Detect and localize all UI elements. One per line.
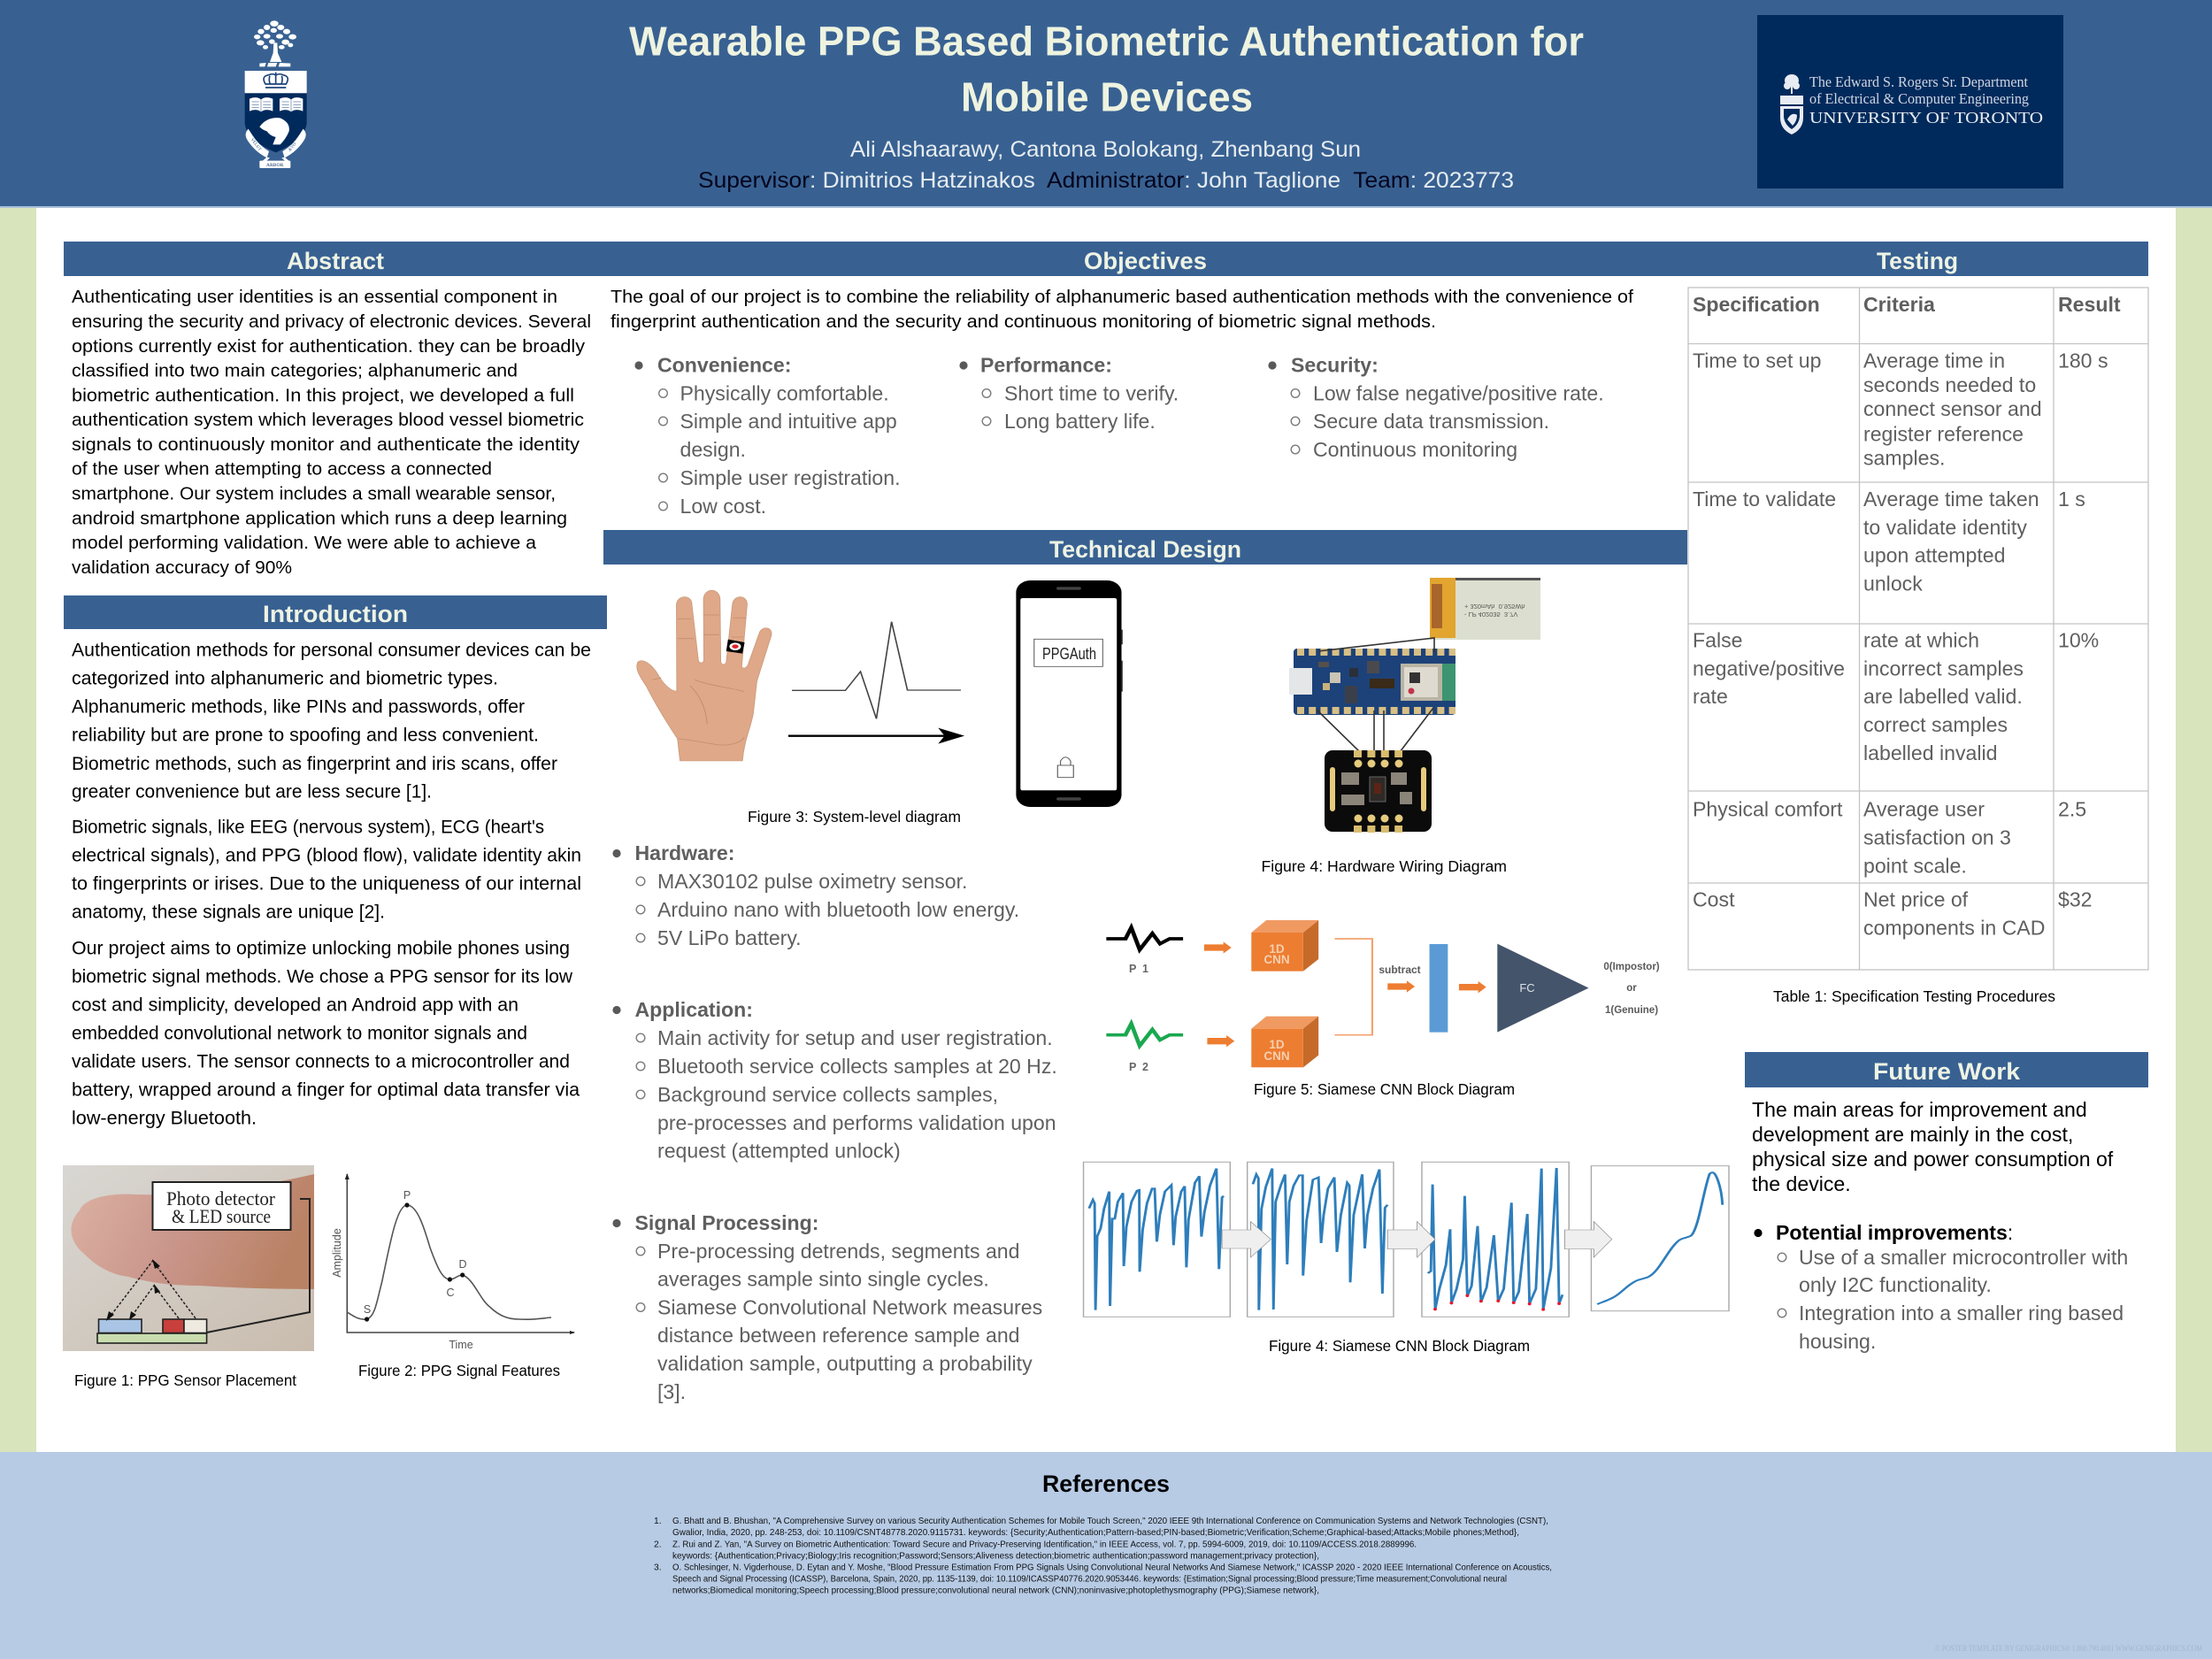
row: cost: components in CAD — [1863, 917, 2045, 940]
row: physical comfort — [1693, 798, 2086, 878]
reference list: 2. — [654, 1540, 662, 1550]
figure 2: PPG signal features: C — [446, 1286, 455, 1299]
future work text — [1752, 1098, 2114, 1195]
technical design: application list: Bluetooth service collects samples at 20 Hz. — [657, 1055, 1057, 1078]
introduction text: anatomy, these signals are unique [2]. — [72, 901, 385, 922]
technical design: signal processing list: Siamese Convolutional Network measures — [657, 1295, 1042, 1318]
fully connected block — [1497, 944, 1589, 1033]
future work text: the device. — [1752, 1172, 1851, 1195]
figure 5: siamese CNN block diagram: 1D — [1269, 942, 1285, 956]
objectives: performance list: Short time to verify. — [1004, 381, 1179, 404]
connecting wires — [1317, 638, 1434, 752]
figure 5: siamese CNN block diagram: CNN — [1263, 953, 1290, 966]
row: false rate: negative/positive — [1693, 657, 1845, 680]
orange arrows — [1204, 941, 1486, 1047]
university crest logo: VELUT — [250, 138, 262, 152]
row: time to validate: Average time taken — [1863, 488, 2039, 511]
introduction text: battery, wrapped around a finger for optimal data transfer via — [72, 1079, 580, 1101]
figure 1: PPG sensor placement: & LED source — [172, 1205, 271, 1227]
abstract text: android smartphone application which runs a deep learning — [72, 508, 567, 528]
left side strip — [0, 207, 36, 1453]
abstract text: options currently exist for authentication. they can be broadly — [72, 336, 586, 357]
figure 5: siamese CNN block diagram: or — [1626, 983, 1637, 994]
heading: objectives: Objectives — [1084, 248, 1207, 274]
abstract text: biometric authentication. In this project, we developed a full — [72, 385, 574, 405]
row: time to validate: to validate identity — [1863, 516, 2027, 539]
figure: signal processing stages — [1084, 1162, 1729, 1317]
figure 5: siamese CNN block diagram: FC — [1519, 981, 1535, 995]
row: physical comfort: point scale. — [1863, 855, 1967, 878]
icon: hand with ring sensor — [637, 590, 772, 761]
top section bar — [64, 242, 2148, 276]
stage 4 single cycle — [1591, 1166, 1729, 1311]
row: false rate — [1693, 628, 2099, 764]
objectives: security list: Continuous monitoring — [1313, 438, 1517, 461]
title: Wearable PPG Based Biometric Authentication for — [629, 18, 1584, 64]
MAX30102 sensor board — [1325, 750, 1432, 832]
future work: potential improvements list — [1754, 1221, 2128, 1353]
heading: testing: Testing — [1877, 248, 1958, 274]
future work text: physical size and power consumption of — [1752, 1148, 2114, 1171]
technical design: signal processing list: averages sample sinto single cycles. — [657, 1268, 989, 1291]
technical design: hardware list — [612, 841, 1019, 949]
technical design: application list: request (attempted unlock) — [657, 1140, 901, 1163]
introduction text: low-energy Bluetooth. — [72, 1108, 257, 1129]
battery: + 320mAh 0.925Wh — [1464, 603, 1525, 611]
row: physical comfort: 2.5 — [2058, 798, 2086, 821]
objectives: convenience list: Low cost. — [680, 495, 766, 518]
row: physical comfort: Average user — [1863, 798, 1985, 821]
future work: potential improvements list: only I2C functionality. — [1799, 1273, 1992, 1296]
objectives text: fingerprint authentication and the security and continuous monitoring of biometric signal methods. — [611, 311, 1436, 332]
header banner — [0, 0, 2212, 208]
caption: figure 3: Figure 3: System-level diagram — [748, 808, 961, 826]
figure 1: PPG sensor placement: Photo detector — [166, 1187, 276, 1210]
caption: figure 2: Figure 2: PPG Signal Features — [358, 1362, 560, 1379]
introduction text: validate users. The sensor connects to a microcontroller and — [72, 1051, 570, 1072]
caption: figure 4 hardware: Figure 4: Hardware Wiring Diagram — [1262, 857, 1507, 875]
abstract text: authentication system which leverages blood vessel biometric — [72, 410, 584, 430]
row: time to set up: Average time in — [1863, 349, 2005, 373]
introduction text: Our project aims to optimize unlocking mobile phones using — [72, 938, 570, 959]
reference list: O. Schlesinger, N. Vigderhouse, D. Eytan and Y. Moshe, "Blood Pressure Estimation From PPG Signals Using Convolutional Neural Networks And Siamese Network," ICASSP 2020 - 2020 IEEE International Conference on Acoustics, — [672, 1563, 1552, 1573]
introduction text: reliability but are prone to spoofing and less convenient. — [72, 724, 539, 745]
stage 3 segmented signal — [1422, 1162, 1569, 1317]
abstract text: smartphone. Our system includes a small wearable sensor, — [72, 483, 556, 504]
figure 2: PPG signal features: S — [364, 1303, 371, 1316]
row: physical comfort: Physical comfort — [1693, 798, 1843, 821]
authors: Ali Alshaarawy, Cantona Bolokang, Zhenbang Sun — [850, 137, 1361, 162]
row: false rate: incorrect samples — [1863, 657, 2024, 680]
merge bracket — [1334, 939, 1372, 1035]
references panel — [0, 1452, 2212, 1659]
department logo: UNIVERSITY OF TORONTO — [1809, 109, 2043, 127]
figure 1: PPG sensor placement — [63, 1165, 314, 1351]
figure 5: siamese CNN block diagram: 1D — [1269, 1038, 1285, 1051]
objectives text — [611, 287, 1633, 332]
stage 2 detrended signal — [1248, 1162, 1394, 1317]
introduction text — [72, 639, 591, 1129]
figure 5: siamese CNN block diagram — [1106, 920, 1660, 1073]
caption: figure 4 siamese: Figure 4: Siamese CNN Block Diagram — [1269, 1337, 1530, 1355]
row: physical comfort: satisfaction on 3 — [1863, 826, 2011, 849]
input signal P2 — [1106, 1024, 1183, 1046]
arrow: wireless transfer — [788, 728, 964, 744]
figure 2: PPG signal features: D — [458, 1258, 467, 1271]
row: time to validate: unlock — [1863, 572, 1923, 595]
objectives: security list: Secure data transmission. — [1313, 410, 1549, 433]
input signal P1 — [1106, 927, 1183, 949]
row: time to set up — [1693, 349, 2108, 470]
abstract text: signals to continuously monitor and authenticate the identity — [72, 434, 580, 455]
introduction text: greater convenience but are less secure [1]. — [72, 780, 432, 802]
block arrows — [1222, 1222, 1612, 1257]
future work text: The main areas for improvement and — [1752, 1098, 2087, 1121]
university crest logo: ARBOR — [266, 163, 284, 168]
CNN cube bottom — [1251, 1017, 1318, 1067]
reference list: Z. Rui and Z. Yan, "A Survey on Biometric Authentication: Toward Secure and Privacy-Preserving Identification," in IEEE Access, vol. 7, pp. 5994-6009, 2019, doi: 10.1109/ACCESS.2018.2889996. — [672, 1540, 1417, 1550]
objectives: security list: Security: — [1291, 354, 1379, 377]
references heading: References — [1042, 1471, 1170, 1497]
abstract text: classified into two main categories; alphanumeric and — [72, 361, 518, 380]
introduction text: categorized into alphanumeric and biometric types. — [72, 667, 498, 688]
caption: figure 5: Figure 5: Siamese CNN Block Diagram — [1254, 1080, 1515, 1098]
introduction text: cost and simplicity, developed an Android app with an — [72, 995, 518, 1016]
introduction text: embedded convolutional network to monitor signals and — [72, 1023, 527, 1044]
technical design: signal processing list: distance between reference sample and — [657, 1324, 1020, 1347]
department logo: of Electrical & Computer Engineering — [1809, 90, 2029, 107]
row: false rate: False — [1693, 628, 1742, 651]
abstract text — [72, 287, 591, 578]
abstract text: of the user when attempting to access a connected — [72, 459, 492, 480]
figure 2: PPG signal features: Amplitude — [331, 1228, 343, 1278]
row: time to validate — [1693, 488, 2085, 595]
introduction text: biometric signal methods. We chose a PPG sensor for its low — [72, 966, 572, 987]
objectives: convenience list: design. — [680, 438, 746, 461]
figure 2: PPG signal features: P — [403, 1189, 411, 1202]
objectives: performance list: Long battery life. — [1004, 410, 1156, 433]
stage 1 raw signal — [1084, 1162, 1230, 1317]
caption: table 1: Table 1: Specification Testing Procedures — [1773, 987, 2055, 1005]
row: false rate: correct samples — [1863, 713, 2008, 736]
table header row: Result — [2058, 293, 2121, 316]
department logo: The Edward S. Rogers Sr. Department — [1809, 73, 2028, 90]
figure 2: PPG signal features: Time — [449, 1339, 473, 1351]
technical design: signal processing list: Signal Processing: — [635, 1211, 818, 1234]
technical design: signal processing list: validation sample, outputting a probability — [657, 1352, 1033, 1375]
university crest logo — [245, 20, 307, 168]
abstract text: Authenticating user identities is an essential component in — [72, 287, 557, 307]
reference list: 1. — [654, 1517, 662, 1526]
objectives text: The goal of our project is to combine the reliability of alphanumeric based authentication methods with the convenience of — [611, 287, 1633, 307]
caption: figure 1: Figure 1: PPG Sensor Placement — [74, 1371, 296, 1389]
objectives: convenience list: Simple and intuitive app — [680, 410, 897, 433]
reference list: keywords: {Authentication;Privacy;Biology;Iris recognition;Password;Sensors;Aliveness detection;biometric authentication;password management;privacy protection}, — [672, 1552, 1319, 1561]
table header row — [1693, 293, 2121, 316]
title: Mobile Devices — [961, 74, 1253, 120]
row: false rate: rate — [1693, 685, 1728, 708]
row: false rate: 10% — [2058, 628, 2099, 651]
figure 5: siamese CNN block diagram: subtract — [1379, 964, 1421, 976]
technical design: hardware list: Hardware: — [635, 841, 734, 864]
objectives: convenience list: Physically comfortable. — [680, 381, 889, 404]
reference list: Speech and Signal Processing (ICASSP), Barcelona, Spain, 2020, pp. 1135-1139, doi: 10.1109/ICASSP40776.2020.9053446. keywords: {Estimation;Signal processing;Blood pressure;Time measurement;Convolutional neural — [672, 1575, 1507, 1584]
row: time to set up: samples. — [1863, 447, 1945, 470]
figure 5: siamese CNN block diagram: CNN — [1263, 1049, 1290, 1063]
figure 5: siamese CNN block diagram: 0(Impostor) — [1603, 962, 1660, 972]
heading: abstract: Abstract — [287, 248, 384, 274]
row: time to validate: upon attempted — [1863, 544, 2005, 567]
row: cost — [1693, 888, 2093, 940]
introduction bar: Introduction — [263, 601, 408, 627]
row: false rate: labelled invalid — [1863, 741, 1998, 764]
row: time to set up: register reference — [1863, 423, 2024, 446]
row: time to set up: seconds needed to — [1863, 373, 2036, 396]
technical design: hardware list: MAX30102 pulse oximetry sensor. — [657, 870, 967, 893]
technical design: application list: Application: — [635, 998, 753, 1021]
signal pulse — [792, 622, 961, 718]
future work: potential improvements list: housing. — [1799, 1330, 1876, 1353]
objectives: convenience list — [634, 354, 901, 518]
objectives: convenience list: Simple user registration. — [680, 466, 901, 489]
icon: smartphone: PPGAuth — [1042, 645, 1096, 663]
row: false rate: are labelled valid. — [1863, 685, 2023, 708]
objectives: performance list — [959, 354, 1179, 433]
subtraction vector — [1430, 944, 1448, 1033]
reference list: G. Bhatt and B. Bhushan, "A Comprehensive Survey on various Security Authentication Schemes for Mobile Touch Screen," 2020 IEEE 9th International Conference on Communication Systems and Network Technologies (CSNT), — [672, 1517, 1548, 1526]
reference list: Gwalior, India, 2020, pp. 248-253, doi: 10.1109/CSNT48778.2020.9115731. keywords: {Security;Authentication;Pattern-based;PIN-based;Biometric;Verification;Scheme;Graphical-based;Attacks;Mobile phones;Method}, — [672, 1528, 1519, 1538]
row: cost: Net price of — [1863, 888, 1969, 911]
reference list — [654, 1517, 1552, 1596]
introduction text: to fingerprints or irises. Due to the uniqueness of our internal — [72, 872, 581, 894]
abstract text: ensuring the security and privacy of electronic devices. Several — [72, 311, 591, 332]
figure 5: siamese CNN block diagram: 1(Genuine) — [1605, 1005, 1658, 1016]
department logo — [1757, 15, 2063, 188]
figure 5: siamese CNN block diagram: P 1 — [1129, 963, 1148, 975]
university crest logo: ÆVO — [288, 142, 298, 153]
table header row: Criteria — [1863, 293, 1935, 316]
right side strip — [2176, 207, 2212, 1453]
row: time to set up: 180 s — [2058, 349, 2108, 373]
abstract text: model performing validation. We were able to achieve a — [72, 533, 537, 553]
technical design bar: Technical Design — [1049, 536, 1241, 563]
objectives: convenience list: Convenience: — [657, 354, 791, 377]
introduction text: electrical signals), and PPG (blood flow), validate identity akin — [72, 844, 581, 865]
technical design: signal processing list: [3]. — [657, 1380, 686, 1403]
icon: smartphone — [1016, 580, 1123, 807]
battery — [1430, 578, 1540, 640]
introduction bar — [64, 595, 607, 629]
title — [629, 18, 1584, 120]
row: time to set up: connect sensor and — [1863, 397, 2042, 420]
future work bar — [1745, 1052, 2148, 1087]
technical design: application list — [612, 998, 1057, 1163]
introduction text: Biometric methods, such as fingerprint and iris scans, offer — [72, 753, 557, 774]
future work bar: Future Work — [1873, 1058, 2021, 1085]
reference list: networks;Biomedical monitoring;Speech processing;Blood pressure;convolutional neural network (CNN);noninvasive;photoplethysmography (PPG);Siamese network}, — [672, 1586, 1319, 1596]
technical design: signal processing list: Pre-processing detrends, segments and — [657, 1240, 1019, 1263]
future work text: development are mainly in the cost, — [1752, 1123, 2073, 1146]
future work: potential improvements list: Integration into a smaller ring based — [1799, 1302, 2124, 1325]
figure 2: PPG signal features — [331, 1173, 575, 1351]
row: cost: $32 — [2058, 888, 2093, 911]
figure 3: system-level diagram — [637, 580, 1123, 807]
battery: - LP 402035 3.7V — [1464, 611, 1517, 618]
technical design: application list: Main activity for setup and user registration. — [657, 1026, 1053, 1049]
future work: potential improvements list: Use of a smaller microcontroller with — [1799, 1246, 2128, 1269]
supervisor line: Supervisor : Dimitrios Hatzinakos Administrator : John Taglione Team: 2023773 — [698, 168, 1514, 193]
figure 4: hardware wiring diagram — [1289, 578, 1540, 832]
technical design: hardware list: 5V LiPo battery. — [657, 926, 802, 949]
objectives: security list — [1268, 354, 1604, 461]
objectives: security list: Low false negative/positive rate. — [1313, 381, 1604, 404]
technical design: application list: Background service collects samples, — [657, 1083, 998, 1106]
introduction text: Alphanumeric methods, like PINs and passwords, offer — [72, 695, 525, 717]
abstract text: validation accuracy of 90% — [72, 557, 292, 578]
technical design bar — [603, 530, 1687, 565]
testing table — [1688, 288, 2148, 970]
row: time to set up: Time to set up — [1693, 349, 1821, 373]
CNN cube top — [1251, 920, 1318, 972]
future work: potential improvements list: Potential improvements: — [1776, 1221, 2013, 1244]
figure 5: siamese CNN block diagram: P 2 — [1129, 1061, 1148, 1073]
row: time to validate: 1 s — [2058, 488, 2085, 511]
introduction text: Authentication methods for personal consumer devices can be — [72, 639, 591, 660]
introduction text: Biometric signals, like EEG (nervous system), ECG (heart's — [72, 816, 544, 837]
arduino board — [1289, 649, 1455, 715]
row: false rate: rate at which — [1863, 628, 1979, 651]
technical design: application list: pre-processes and performs validation upon — [657, 1111, 1056, 1134]
row: time to validate: Time to validate — [1693, 488, 1836, 511]
table header row: Specification — [1693, 293, 1820, 316]
technical design: hardware list: Arduino nano with bluetooth low energy. — [657, 898, 1019, 921]
row: cost: Cost — [1693, 888, 1735, 911]
technical design: signal processing list — [612, 1211, 1042, 1403]
objectives: performance list: Performance: — [980, 354, 1112, 377]
reference list: 3. — [654, 1563, 662, 1573]
